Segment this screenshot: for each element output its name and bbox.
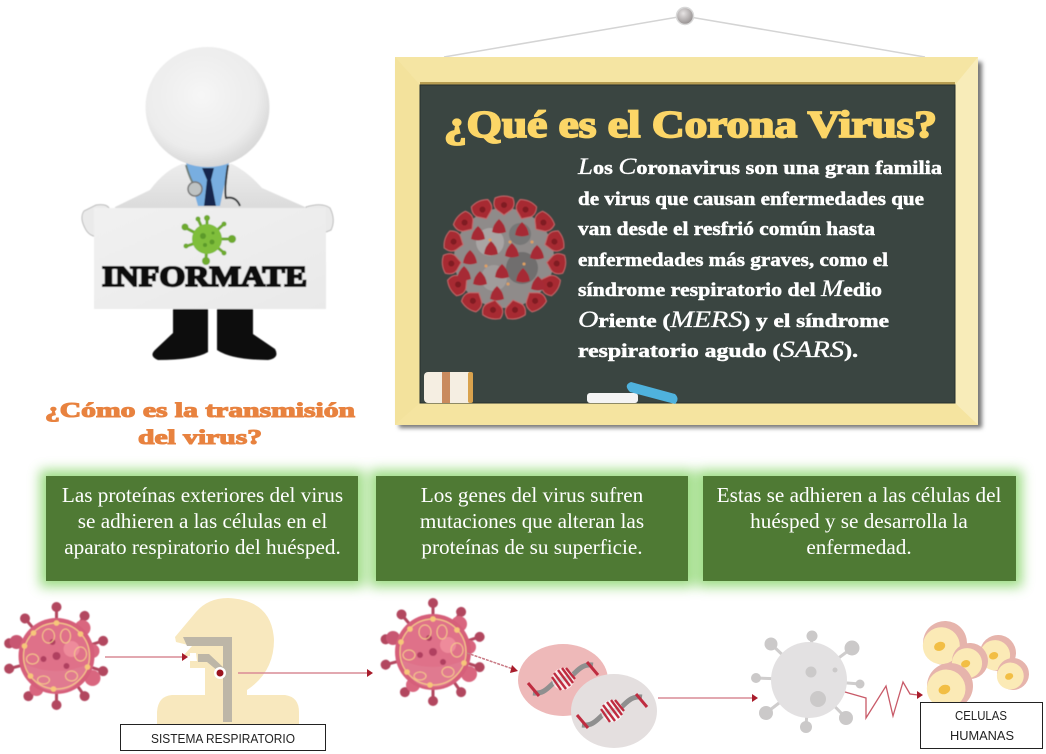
panel: chalkboard (395, 8, 982, 428)
step box 1: se adhieren a las células en el (78, 509, 327, 533)
label: respiratory system (120, 724, 326, 750)
doctor coat (115, 164, 305, 240)
box glow (40, 470, 1022, 587)
icon: white chalk (587, 393, 638, 403)
diagram: transmission flow (3, 598, 1043, 750)
icon: green virus on sign (182, 215, 236, 265)
step box 2 (376, 476, 688, 581)
heading: transmission: del virus? (138, 425, 262, 449)
doctor shoes (152, 332, 276, 360)
arrow: virus to airway (105, 653, 188, 661)
icon: human cells (916, 615, 1034, 716)
step box 3: Estas se adhieren a las células del (717, 483, 1001, 507)
board hanger (444, 8, 925, 57)
icon: coronavirus (441, 196, 567, 321)
label: human cells: HUMANAS (950, 729, 1014, 743)
step box 2: mutaciones que alteran las (420, 509, 644, 533)
board shadow (399, 62, 982, 428)
step box 1: Las proteínas exteriores del virus (62, 483, 343, 507)
step box 2: Los genes del virus sufren (421, 483, 644, 507)
board body text (577, 154, 943, 362)
icon: pink virus middle (380, 598, 486, 706)
doctor legs (173, 306, 253, 338)
board body text: de virus que causan enfermedades que (578, 189, 924, 210)
label: respiratory system: SISTEMA RESPIRATORIO (151, 732, 295, 746)
step box 3 (703, 476, 1016, 581)
label: human cells: CELULAS (955, 709, 1007, 723)
sign board (94, 208, 326, 309)
board body text: Oriente ( MERS ) y el síndrome (578, 307, 889, 332)
arrow: zigzag to cells (845, 682, 923, 718)
step box 2: proteínas de su superficie. (421, 535, 643, 559)
arrow: virus to genes (467, 653, 518, 673)
step box 3: enfermedad. (806, 535, 912, 559)
doctor head (146, 47, 270, 167)
board frame (395, 57, 978, 425)
step box 3: huésped y se desarrolla la (750, 509, 968, 533)
board body text: Los Coronavirus son una gran familia (577, 154, 943, 179)
board body text: van desde el resfrió común hasta (578, 219, 876, 240)
arrow: genes to cell virus (658, 694, 758, 702)
icon: gray virus (751, 630, 864, 733)
icon: pink gene circle (518, 644, 608, 716)
label: human cells (920, 702, 1042, 748)
heading: transmission: ¿Cómo es la transmisión (45, 398, 355, 422)
board surface (420, 85, 955, 403)
right hand (306, 205, 333, 234)
board body text: respiratorio agudo ( SARS ). (578, 337, 858, 362)
board body text: enfermedades más graves, como el (578, 250, 888, 271)
step box 1: aparato respiratorio del huésped. (64, 535, 341, 559)
sign text: INFORMATE (102, 261, 307, 293)
step box 1 (46, 476, 358, 581)
panel: green text boxes (40, 470, 1022, 587)
icon: eraser (424, 372, 473, 403)
figure: doctor holding sign (82, 47, 333, 360)
board title: ¿Qué es el Corona Virus? (444, 104, 937, 146)
icon: respiratory head (157, 598, 299, 724)
left hand (82, 205, 110, 237)
doctor shirt and tie (186, 163, 240, 206)
arrow: airway to mutated virus (238, 669, 373, 677)
heading: transmission (45, 398, 355, 449)
icon: blue chalk (627, 382, 678, 404)
icon: gray gene circle (571, 674, 657, 748)
board body text: síndrome respiratorio del Medio (578, 276, 882, 301)
icon: pink virus left (3, 602, 109, 710)
